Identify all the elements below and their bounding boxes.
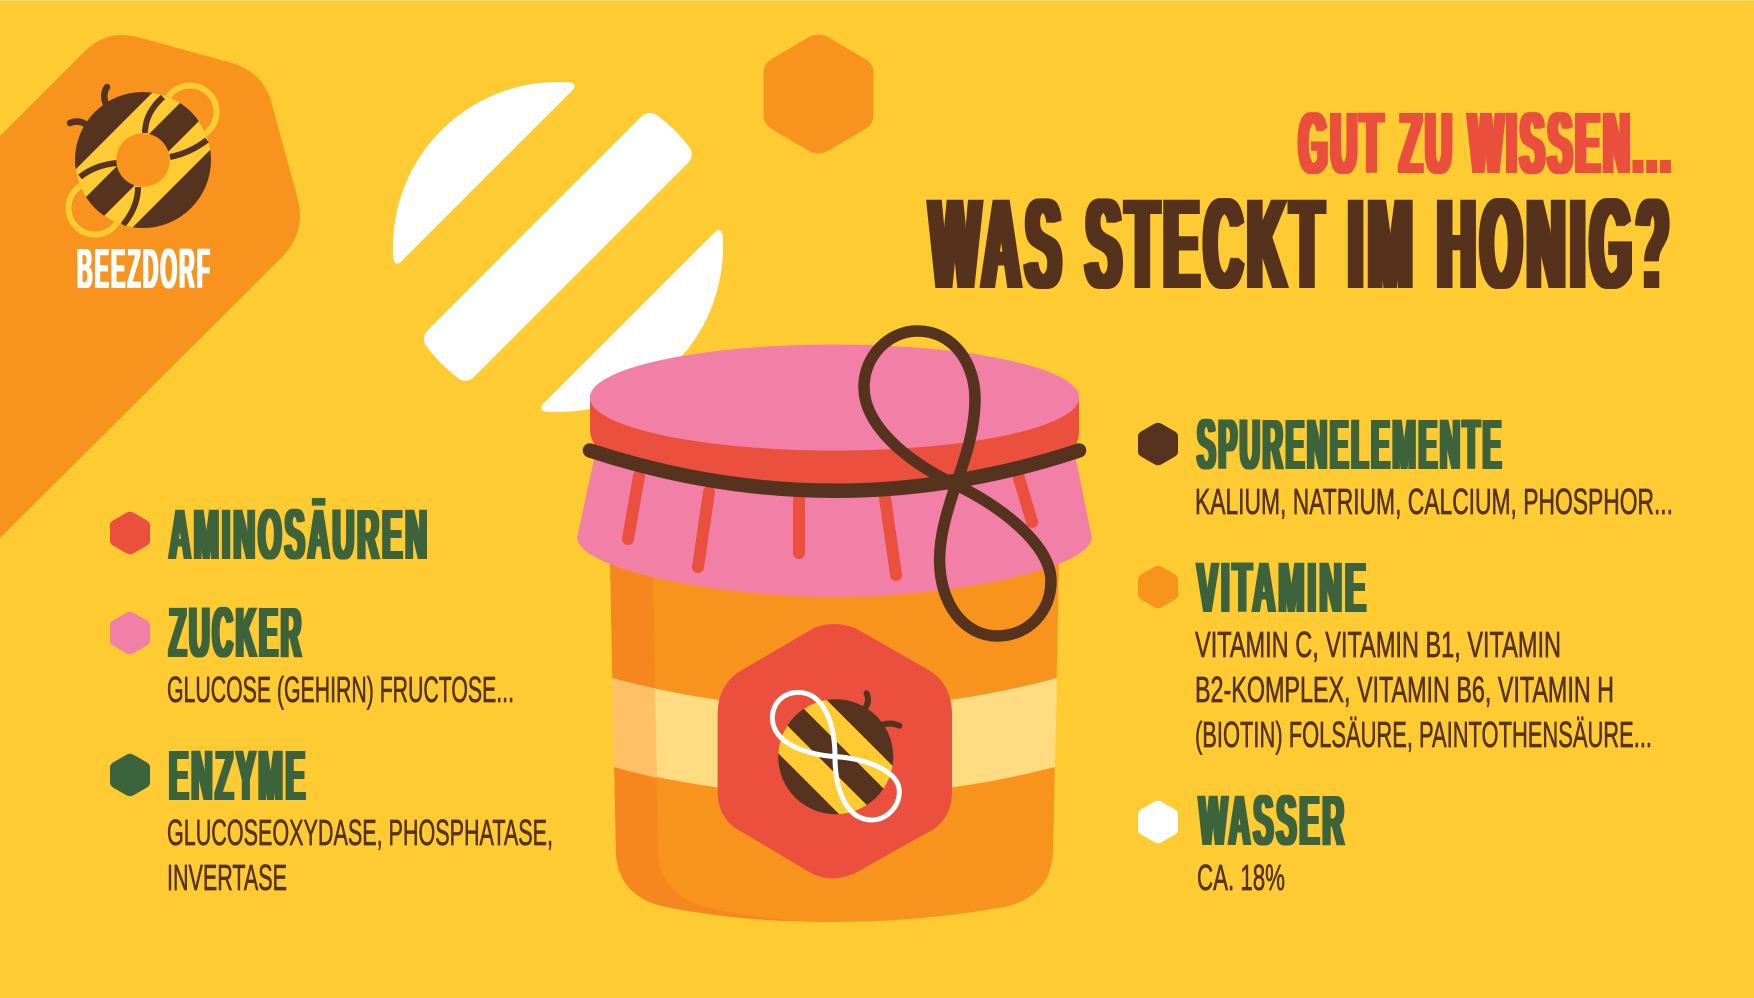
white striped circle — [397, 86, 719, 408]
item: Wasser: CA. 18% — [1197, 857, 1285, 898]
label bee icon — [770, 690, 902, 822]
hexagon label — [718, 624, 952, 878]
rope bow — [864, 331, 1051, 636]
orange hexagon decoration — [764, 34, 874, 154]
pink lid top — [590, 344, 1079, 450]
item: Vitamine — [1138, 549, 1652, 755]
cream band shaded part — [612, 678, 657, 778]
item: Enzyme: GLUCOSEOXYDASE, PHOSPHATASE, — [167, 812, 553, 853]
right list: WASSER — [1199, 782, 1347, 861]
item: Vitamine: VITAMINE — [1197, 549, 1369, 628]
item: Enzyme: ENZYME — [169, 737, 308, 816]
item: Enzyme — [110, 737, 553, 898]
item: Spurenelemente — [1138, 406, 1673, 522]
item: Zucker: GLUCOSE (GEHIRN) FRUCTOSE... — [167, 669, 514, 710]
jar shaded side — [610, 560, 799, 921]
orange logo tag — [0, 35, 300, 538]
item: Aminosäuren — [110, 496, 430, 575]
item: Zucker: ZUCKER — [169, 594, 304, 673]
right list — [1138, 406, 1673, 898]
left list — [110, 496, 553, 898]
honey jar — [577, 331, 1092, 922]
item: Vitamine: VITAMIN C, VITAMIN B1, VITAMIN — [1195, 624, 1561, 665]
item: Enzyme: INVERTASE — [167, 857, 287, 898]
rope — [590, 450, 1079, 491]
item: Wasser — [1138, 782, 1347, 898]
pink cloth — [577, 450, 1092, 597]
cloth folds — [628, 476, 1032, 575]
logo: Beezdorf bee — [66, 82, 220, 238]
jar body — [610, 560, 1059, 922]
red lid rim — [590, 397, 1079, 500]
text: BEEZDORF — [77, 237, 212, 301]
item: Zucker — [110, 594, 514, 710]
left list: AMINOSÄUREN — [169, 496, 430, 575]
cream band — [612, 678, 1057, 796]
